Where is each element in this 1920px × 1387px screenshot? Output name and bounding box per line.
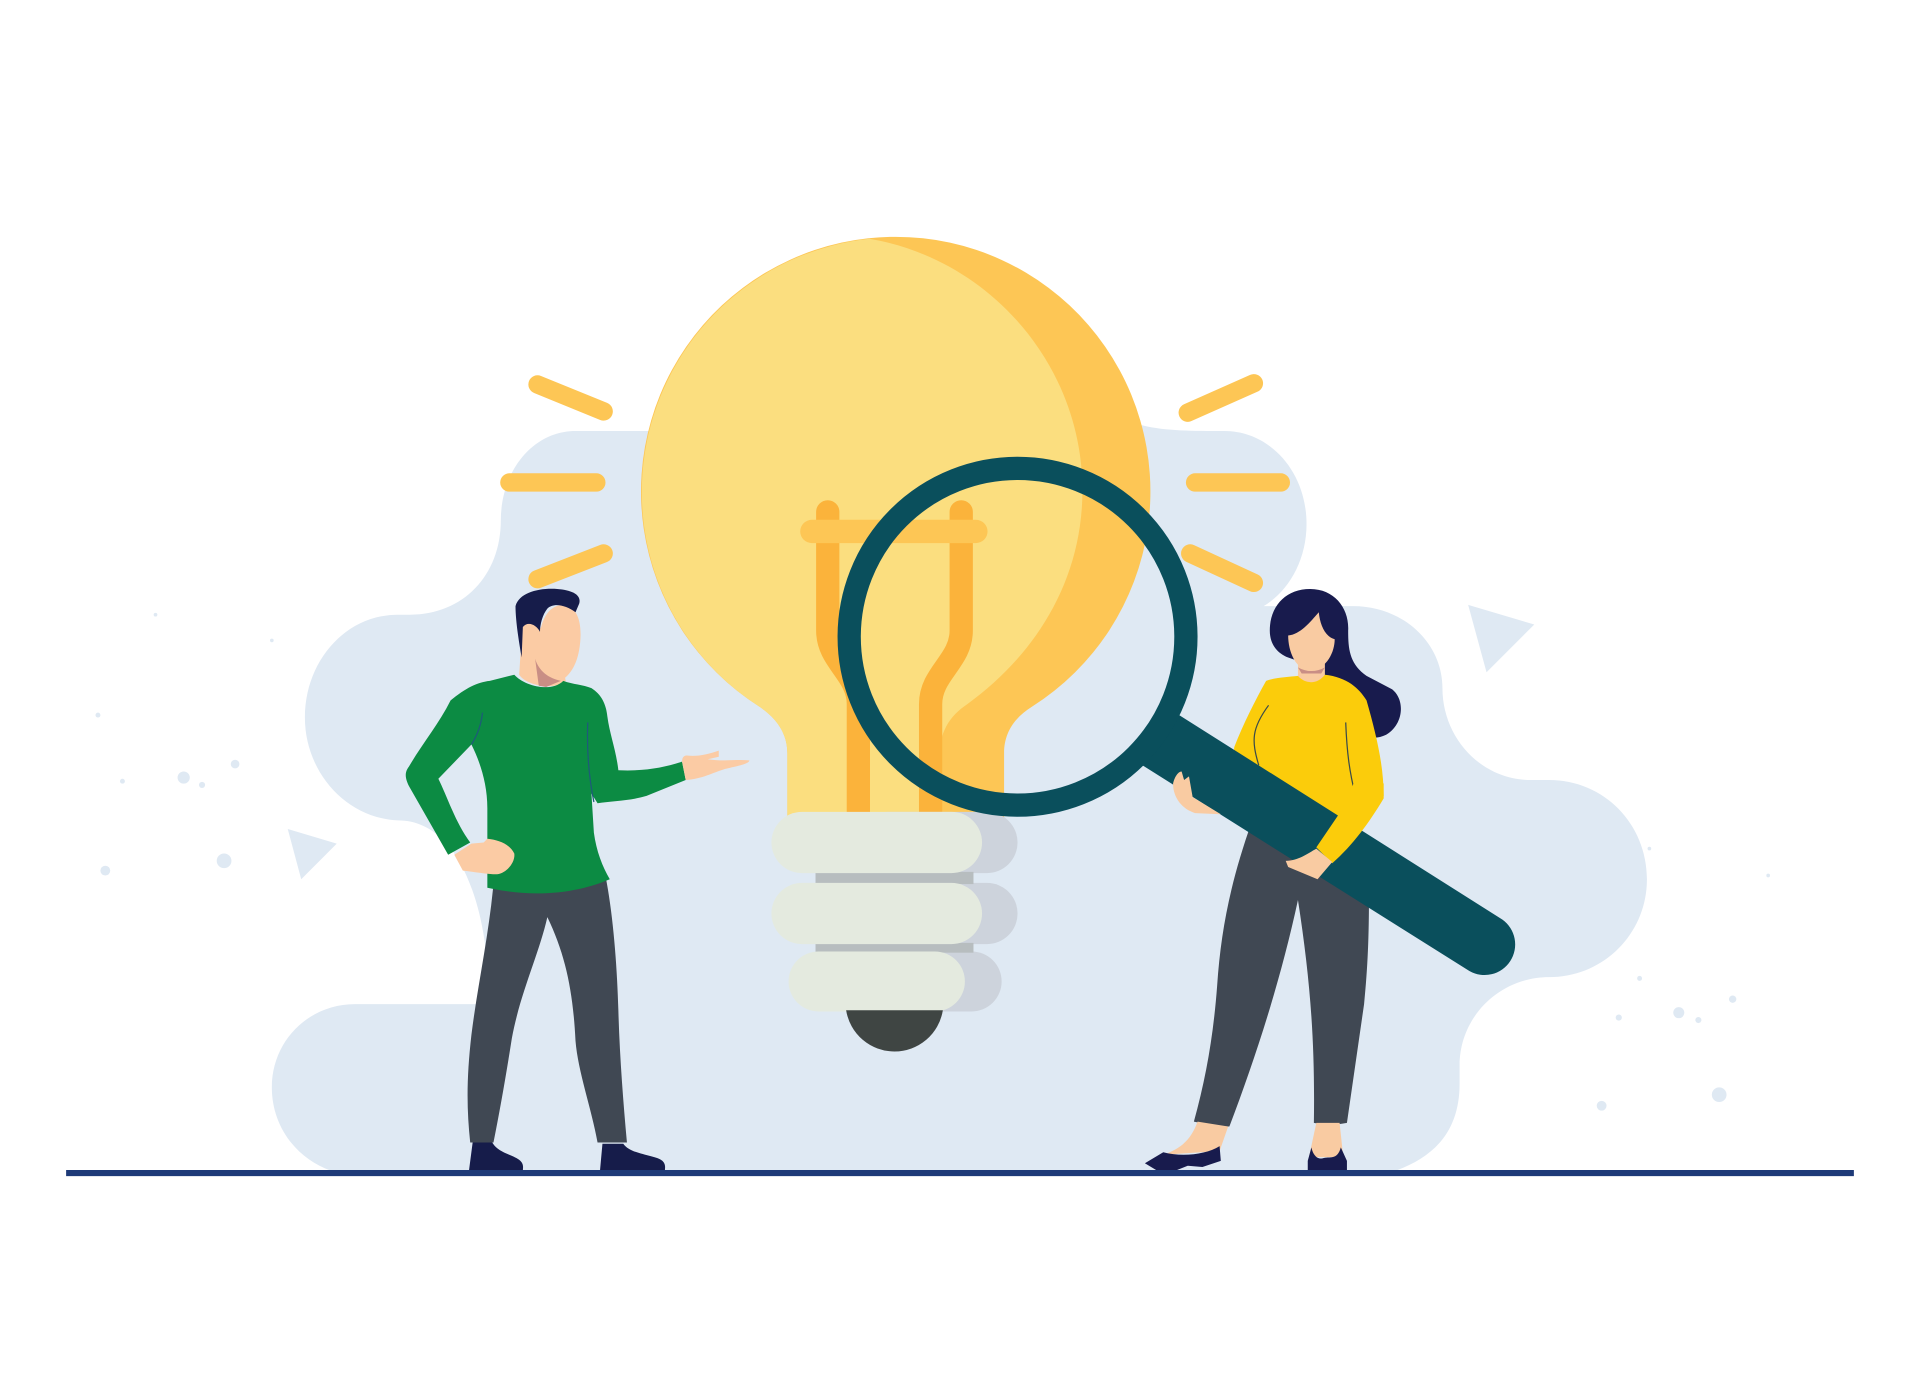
man face [535,605,581,681]
sweater creases [1254,705,1356,796]
man neck shadow [535,659,561,687]
decorative triangle left [288,829,337,879]
screw base bands [771,812,982,1011]
woman neck shadow [1298,667,1325,673]
woman sleeve [1316,765,1384,863]
woman right shoe [1308,1147,1347,1171]
woman back hair [1270,589,1401,738]
woman fingers [1291,849,1316,857]
man sweater [406,675,686,893]
woman: body behind handle [1145,589,1401,1171]
dots right [1597,847,1770,1111]
magnifier handle [1142,715,1515,975]
magnifier lens ring [849,468,1186,805]
man left hand [454,839,514,874]
bulb tip [846,1010,943,1051]
woman left shoe [1145,1146,1221,1171]
man right shoe [600,1144,665,1171]
light bulb [641,237,1150,1051]
screw base shadows [857,812,1018,1011]
woman pants [1194,823,1369,1127]
dots left [96,613,274,876]
man hair [516,589,580,658]
light rays [509,383,1281,583]
filament crossbar [812,522,976,541]
bulb glass highlight [642,239,1082,818]
man sleeve creases [471,713,594,802]
woman sweater [1231,675,1384,851]
woman neck [1298,655,1325,686]
man right hand [682,751,749,780]
man pants [468,879,627,1142]
man left shoe [469,1142,523,1171]
base connectors [816,872,973,953]
magnifying glass [849,468,1515,975]
woman left foot [1163,1122,1228,1155]
woman far hand [1173,771,1221,814]
woman face [1288,612,1335,671]
woman right foot [1309,1123,1343,1157]
decorative triangle right [1468,605,1534,672]
background blob [272,422,1647,1171]
bulb glass shade [641,237,1150,818]
man neck [519,618,566,686]
woman: hands and arm over handle [1173,765,1384,879]
ground line [66,1171,1854,1176]
man [406,589,749,1171]
woman near hand [1286,849,1332,879]
filament [828,512,961,818]
